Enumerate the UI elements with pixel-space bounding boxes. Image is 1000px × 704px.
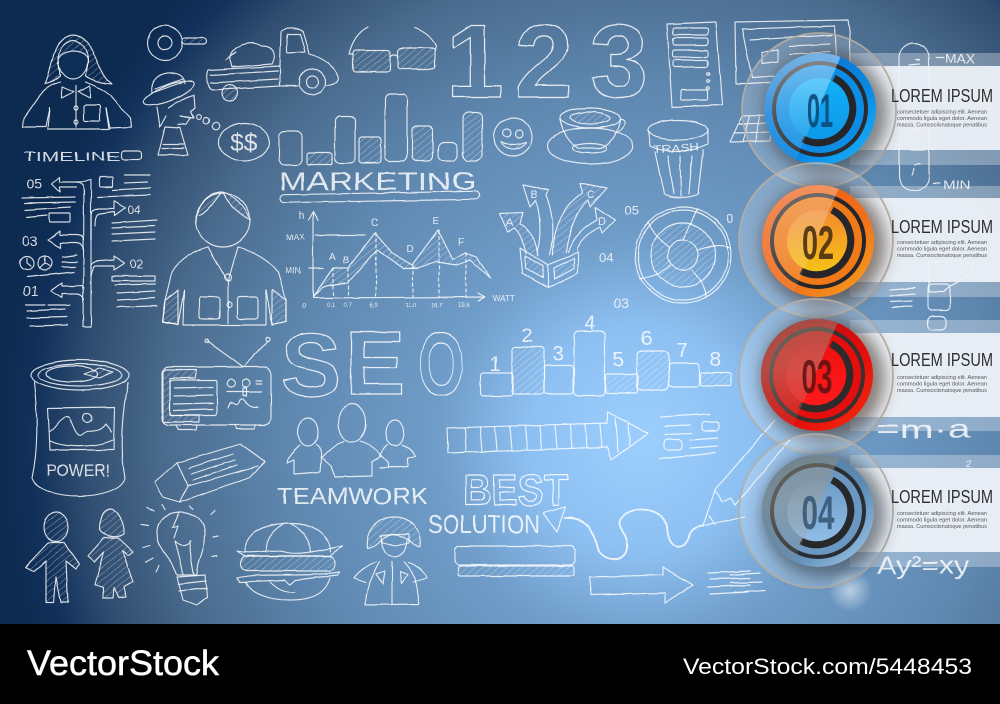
text block 01: consectetuer adipiscing elit. Aenean <box>897 110 987 116</box>
chart labels: 11,0 <box>405 303 417 309</box>
icon: server tower <box>667 22 722 107</box>
heading: best: BEST <box>463 466 568 515</box>
icon: trash can <box>648 120 708 198</box>
chart labels: D <box>407 244 414 255</box>
icon: arrows out of box <box>500 183 615 288</box>
icon: frying pan <box>148 26 207 60</box>
button 03: 03 <box>801 350 833 403</box>
timeline doodle: 05 <box>26 176 42 192</box>
icon: trash can: TRASH <box>653 142 699 156</box>
icon: retro tv radio <box>162 337 271 430</box>
icon: disc fan with labels: 0 <box>726 211 733 226</box>
chart labels: MIN <box>285 265 301 275</box>
icon: hamburger <box>237 523 343 600</box>
heading: seo: O <box>418 314 465 413</box>
big arrow <box>447 412 648 460</box>
heading: seo: E <box>345 314 405 414</box>
heading: marketing: MARKETING <box>279 168 477 196</box>
step numbers: 8 <box>709 349 721 371</box>
step numbers: 1 <box>489 354 501 376</box>
chart labels: 18,7 <box>431 303 443 309</box>
text block 04: commodo ligula eget dolor. Aenean <box>897 518 987 524</box>
icon: power can: POWER! <box>46 462 110 480</box>
heading: teamwork: TEAMWORK <box>277 483 429 509</box>
step numbers: 5 <box>612 349 624 371</box>
icon: thermometer with max and min: MIN <box>943 178 971 192</box>
text block 04: massa. Cumsociisnatoque penatibus <box>897 524 987 530</box>
icon: thermometer with max and min <box>899 43 975 192</box>
chart labels: A <box>329 252 336 263</box>
text block 04 <box>891 487 993 530</box>
timeline doodle <box>20 150 157 327</box>
chart labels: h <box>298 211 304 222</box>
icon: character with sunglasses <box>354 517 427 605</box>
button 04 <box>739 434 893 588</box>
step numbers: 4 <box>584 312 596 334</box>
empty bar doodle <box>455 546 575 576</box>
icon: computer monitor and keyboard <box>730 20 850 142</box>
icon: light bulb <box>141 505 218 605</box>
chart labels: 0 <box>302 303 306 310</box>
panel: banner 01 <box>850 53 1000 165</box>
text block 03: massa. Cumsociisnatoque penatibus <box>897 388 987 394</box>
panel: banner 02 <box>850 186 1000 297</box>
text block 01: commodo ligula eget dolor. Aenean <box>897 116 987 122</box>
bar chart: numbered steps <box>481 331 731 396</box>
step numbers: 2 <box>521 325 533 347</box>
chart labels: WATT <box>493 294 515 303</box>
text block 02: consectetuer adipiscing elit. Aenean <box>897 240 987 246</box>
heading: seo <box>281 314 465 416</box>
icon: arrows out of box: D <box>598 216 606 228</box>
footer logo text: VectorStock <box>27 644 220 683</box>
icon: power can <box>31 360 129 496</box>
formula: force: =m·a <box>876 414 971 444</box>
soft light bottom right <box>828 568 872 612</box>
numbers 1 2 3: 2 <box>515 4 573 120</box>
icon: teamwork people <box>287 404 415 477</box>
icon: arrows out of box: B <box>530 189 537 201</box>
timeline doodle: 01 <box>23 283 39 299</box>
formula superscript: 2 <box>966 459 972 470</box>
icon: eraser <box>155 444 265 502</box>
text block 02 <box>891 217 993 259</box>
button 04: 04 <box>802 486 834 539</box>
icon: disc fan with labels: 03 <box>614 296 628 311</box>
heading: seo: S <box>281 316 341 416</box>
text block 03: consectetuer adipiscing elit. Aenean <box>897 375 987 381</box>
step numbers <box>489 312 721 376</box>
button 02: 02 <box>802 216 834 269</box>
step numbers: 7 <box>676 340 688 362</box>
button 01: 01 <box>807 84 833 137</box>
panel: banner 04 <box>850 455 1000 567</box>
icon: question mark <box>890 261 972 330</box>
step numbers: 6 <box>640 328 652 350</box>
icon: woman with bow tie <box>23 35 131 129</box>
timeline doodle: 04 <box>127 203 141 217</box>
formula: equation: Ay²=xy <box>877 552 970 580</box>
small arrow <box>589 567 693 603</box>
button 01 <box>742 33 896 187</box>
chart axes and series <box>308 212 490 301</box>
chart labels <box>285 211 515 310</box>
step numbers: 3 <box>552 343 564 365</box>
icon: man in jacket <box>162 192 286 325</box>
numbers 1 2 3 <box>446 4 648 120</box>
small text doodle <box>660 414 719 459</box>
chart labels: 0,7 <box>343 303 352 309</box>
text block 02: commodo ligula eget dolor. Aenean <box>897 246 987 252</box>
icon: man and woman <box>26 509 133 602</box>
numbers 1 2 3: 3 <box>590 4 648 120</box>
footer url text: VectorStock.com/5448453 <box>683 654 972 679</box>
footer bar <box>0 624 1000 704</box>
button 03 <box>739 299 893 453</box>
text block 01: massa. Cumsociisnatoque penatibus <box>897 122 987 128</box>
button 02 <box>739 163 893 317</box>
timeline doodle: TIMELINE <box>23 150 120 164</box>
chart labels: MAX <box>286 232 305 242</box>
heading: solution: SOLUTION <box>428 509 540 539</box>
chart labels: 6,9 <box>370 303 379 309</box>
text block 04: consectetuer adipiscing elit. Aenean <box>897 511 987 517</box>
chart labels: F <box>458 237 464 248</box>
small doodle lines lower right <box>730 573 765 592</box>
text: money symbols: $$ <box>230 129 258 157</box>
bar chart: marketing <box>279 94 482 165</box>
arrow: wavy pencil line <box>543 420 790 559</box>
icon: arrows out of box: A <box>506 217 514 229</box>
icon: arrows out of box: C <box>587 189 595 201</box>
timeline doodle: 02 <box>130 257 144 271</box>
icon: disc fan with labels: 05 <box>625 203 639 218</box>
icon: sunglasses <box>349 27 436 72</box>
formula: energy: =mc <box>875 478 925 508</box>
underline <box>280 191 480 203</box>
icon: smiley <box>494 118 532 156</box>
panel: banner 03 <box>850 320 1000 431</box>
icon: man in hat thinking of money <box>141 73 269 161</box>
icon: thermometer with max and min: MAX <box>945 51 975 66</box>
icon: disc fan with labels: 04 <box>599 250 613 265</box>
numbers 1 2 3: 1 <box>446 4 504 120</box>
icon: pickup truck <box>207 28 338 101</box>
chart labels: C <box>371 218 378 229</box>
text block 03 <box>891 350 993 394</box>
chart labels: 0,1 <box>327 303 336 309</box>
line chart: max min <box>285 211 515 310</box>
text block 03: commodo ligula eget dolor. Aenean <box>897 382 987 388</box>
text block 02: massa. Cumsociisnatoque penatibus <box>897 253 987 259</box>
icon: disc fan with labels <box>599 203 733 311</box>
chart labels: E <box>432 216 439 227</box>
small lines doodle <box>708 571 750 594</box>
icon: coffee cup on saucer <box>547 108 633 164</box>
text block 01 <box>891 86 993 128</box>
chart labels: B <box>343 255 350 266</box>
chart labels: 19,6 <box>458 303 470 309</box>
timeline doodle: 03 <box>22 233 38 249</box>
